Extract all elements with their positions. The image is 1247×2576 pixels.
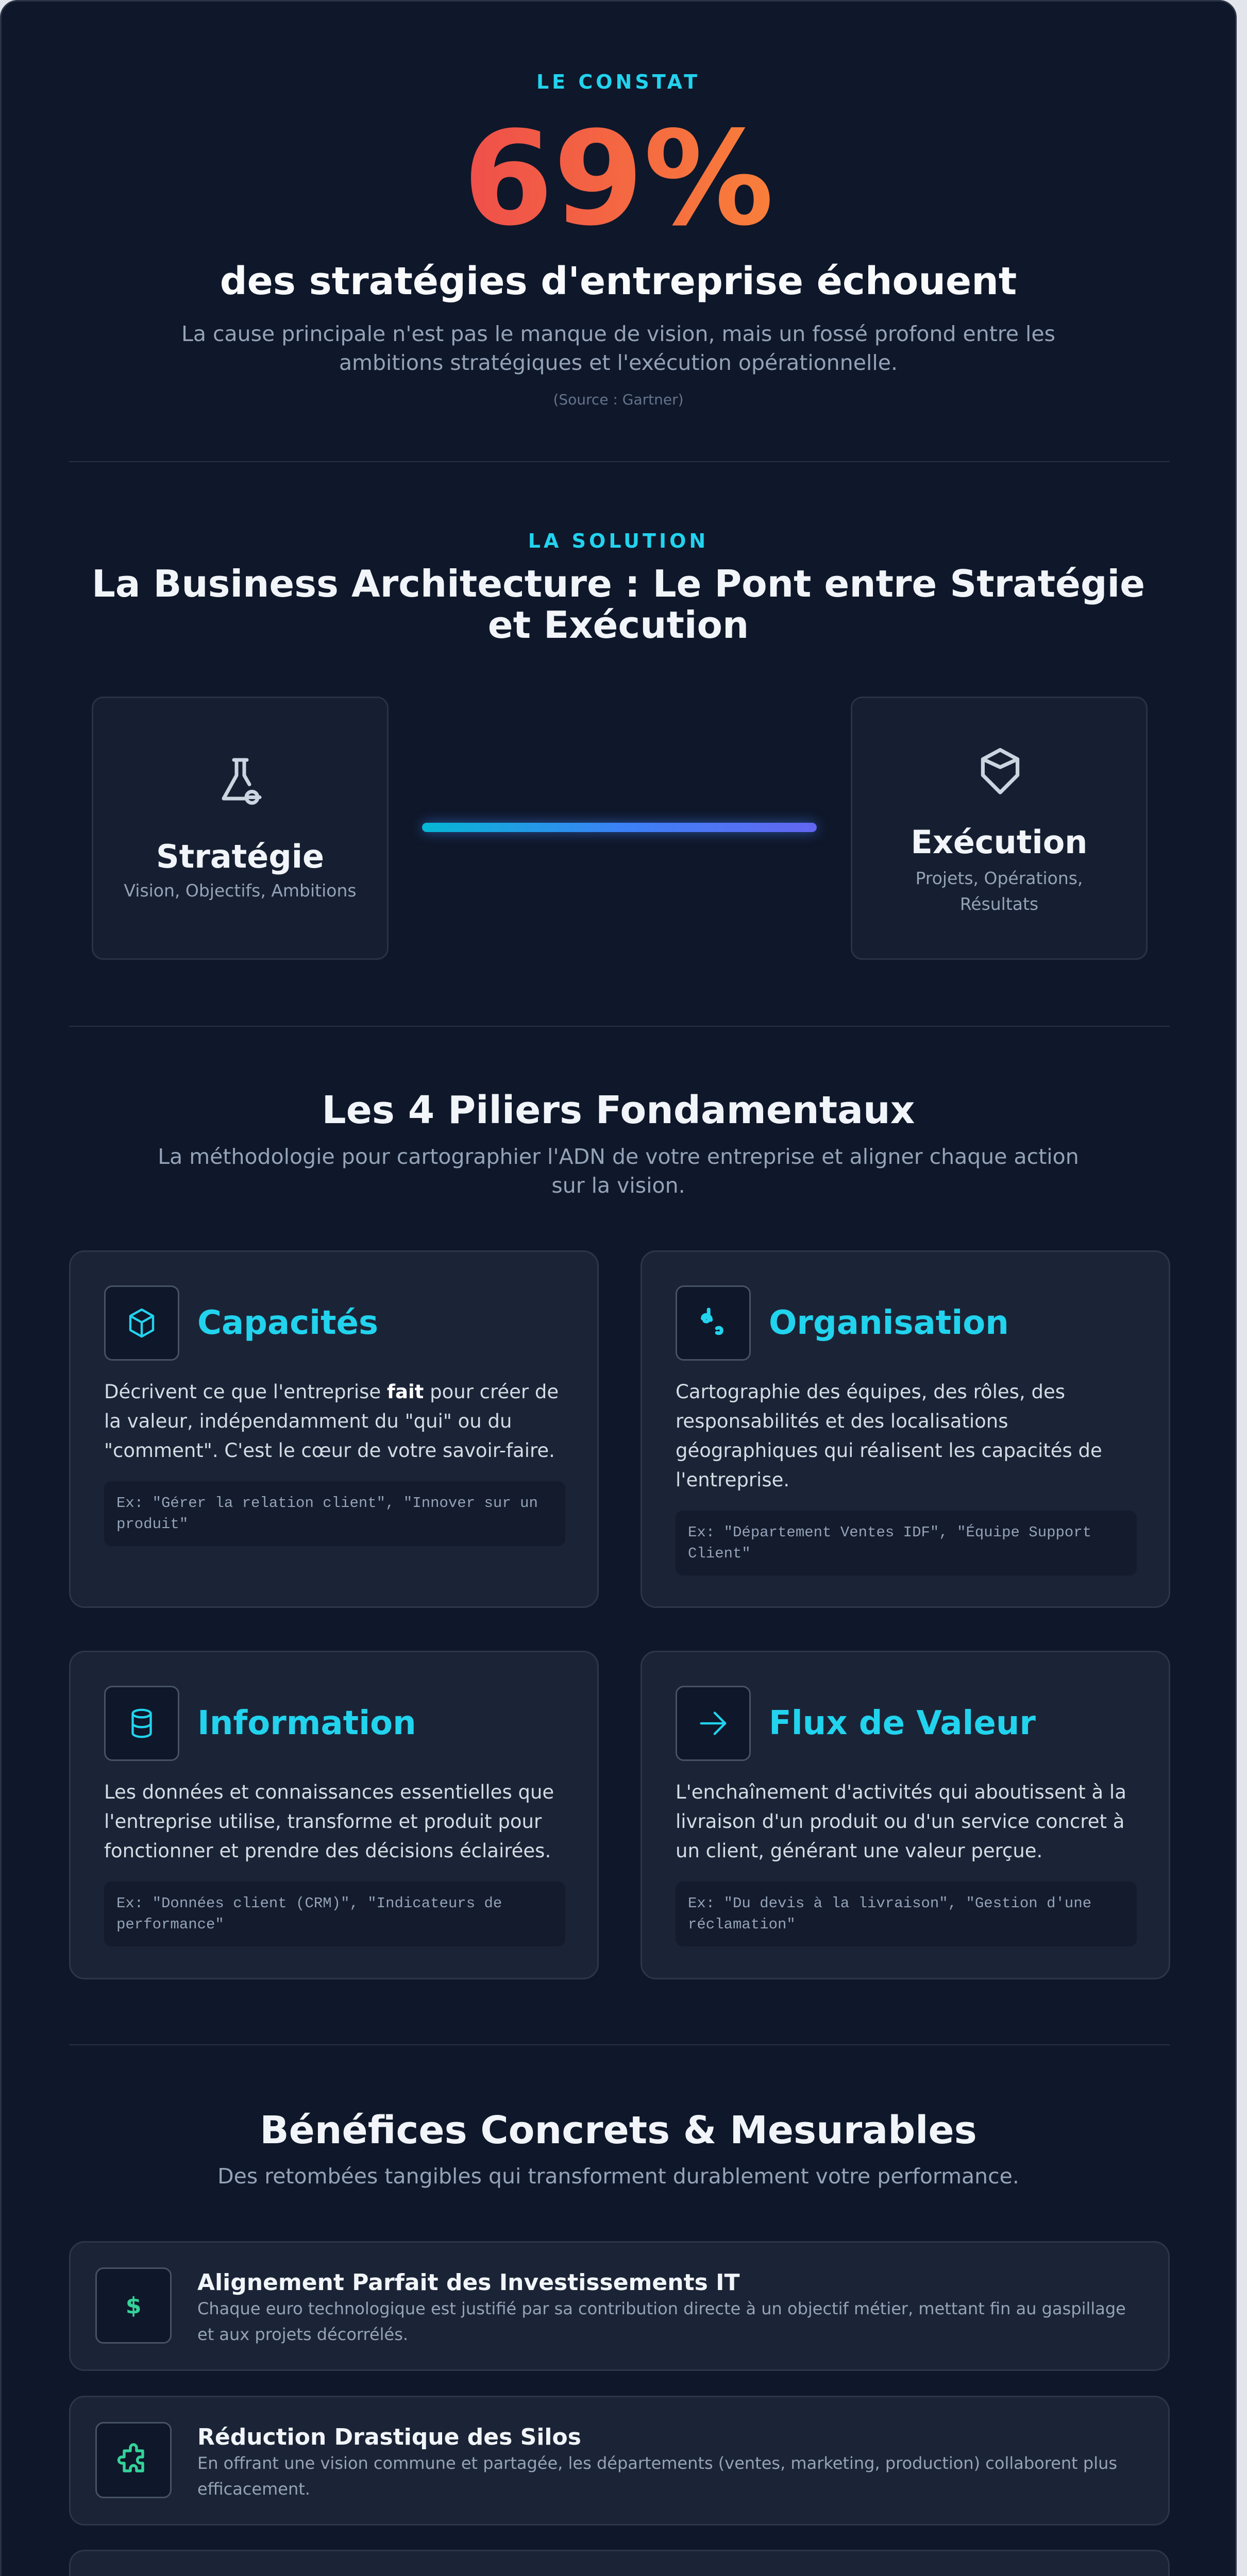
heading: organisation: Organisation bbox=[769, 1304, 1009, 1342]
panel: capacités bbox=[69, 1250, 599, 1608]
benefit: silos bbox=[69, 2396, 1170, 2526]
title: Alignement Parfait des Investissements IT bbox=[197, 2269, 740, 2296]
panel: exécution bbox=[851, 697, 1148, 960]
icon: dollar bbox=[95, 2267, 172, 2344]
heading: 4 piliers: Les 4 Piliers Fondamentaux bbox=[322, 1088, 915, 1132]
panel: organisation bbox=[641, 1250, 1170, 1608]
heading: information: Information bbox=[197, 1704, 416, 1742]
icon: flask bbox=[222, 758, 262, 805]
example: organisation bbox=[676, 1511, 1137, 1575]
panel: flux de valeur bbox=[641, 1651, 1170, 1979]
example: flux bbox=[676, 1882, 1137, 1946]
panel: stratégie bbox=[92, 697, 389, 960]
icon: cube bbox=[104, 1285, 179, 1361]
example: flux: Ex: "Du devis à la livraison", "Gestion d'une réclamation" bbox=[688, 1895, 1091, 1933]
panel: information bbox=[69, 1651, 599, 1979]
heading: flux de valeur: Flux de Valeur bbox=[769, 1704, 1036, 1742]
icon: puzzle bbox=[95, 2422, 172, 2498]
example: organisation: Ex: "Département Ventes IDF", "Équipe Support Client" bbox=[688, 1524, 1091, 1562]
benefit: alignement IT bbox=[69, 2241, 1170, 2371]
icon: org bbox=[676, 1285, 751, 1361]
source: (Source : Gartner) bbox=[553, 391, 684, 408]
example: capacités bbox=[104, 1481, 565, 1546]
example: information bbox=[104, 1882, 565, 1946]
text: flux de valeur: L'enchaînement d'activités qui aboutissent à la livraison d'un produit ou d'un service concret à un client, générant une valeur perçue. bbox=[676, 1781, 1126, 1862]
icon: hexagon bbox=[981, 748, 1019, 794]
title: Réduction Drastique des Silos bbox=[197, 2424, 581, 2450]
explanation text: La cause principale n'est pas le manque de vision, mais un fossé profond entre les ambitions stratégiques et l'exécution opérationnelle. bbox=[181, 321, 1055, 375]
kicker: la solution: LA SOLUTION bbox=[528, 530, 709, 552]
big stat 69%: 69% bbox=[463, 104, 774, 255]
example: information: Ex: "Données client (CRM)", "Indicateurs de performance" bbox=[116, 1895, 502, 1933]
text: information: Les données et connaissances essentielles que l'entreprise utilise, transforme et produit pour fonctionner et prendre des décisions éclairées. bbox=[104, 1781, 554, 1862]
text: piliers subtitle: La méthodologie pour cartographier l'ADN de votre entreprise et aligner chaque action sur la vision. bbox=[158, 1144, 1079, 1198]
bridge bar bbox=[422, 823, 817, 832]
text: organisation: Cartographie des équipes, des rôles, des responsabilités et des localisations géographiques qui réalisent les capacités de l'entreprise. bbox=[676, 1381, 1102, 1491]
text: stratégie sub: Vision, Objectifs, Ambitions bbox=[124, 880, 357, 901]
icon: database bbox=[104, 1686, 179, 1761]
heading: capacités: Capacités bbox=[197, 1304, 378, 1342]
text: capacités: Décrivent ce que l'entreprise fait pour créer de la valeur, indépendamment du "qui" ou du "comment". C'est le cœur de votre savoir-faire. bbox=[104, 1381, 559, 1462]
text: bénéfices subtitle: Des retombées tangibles qui transforment durablement votre performance. bbox=[217, 2164, 1019, 2189]
text: exécution sub: Projets, Opérations, Résultats bbox=[916, 868, 1083, 914]
solution title: La Business Architecture : Le Pont entre Stratégie et Exécution bbox=[92, 562, 1145, 647]
example: capacités: Ex: "Gérer la relation client", "Innover sur un produit" bbox=[116, 1495, 538, 1533]
description: En offrant une vision commune et partagée, les départements (ventes, marketing, production) collaborent plus efficacement. bbox=[197, 2453, 1117, 2499]
heading: bénéfices: Bénéfices Concrets & Mesurables bbox=[260, 2108, 977, 2153]
icon: dollar: $ bbox=[126, 2293, 141, 2318]
heading: exécution: Exécution bbox=[911, 823, 1087, 861]
benefit: time-to-market bbox=[69, 2550, 1170, 2576]
heading: stratégie: Stratégie bbox=[156, 838, 324, 875]
kicker: le constat: LE CONSTAT bbox=[536, 71, 700, 93]
description: Chaque euro technologique est justifié par sa contribution directe à un objectif métier, mettant fin au gaspillage et aux projets décorrélés. bbox=[197, 2299, 1126, 2344]
icon: arrow bbox=[676, 1686, 751, 1761]
headline: des stratégies d'entreprise échouent bbox=[220, 259, 1017, 303]
